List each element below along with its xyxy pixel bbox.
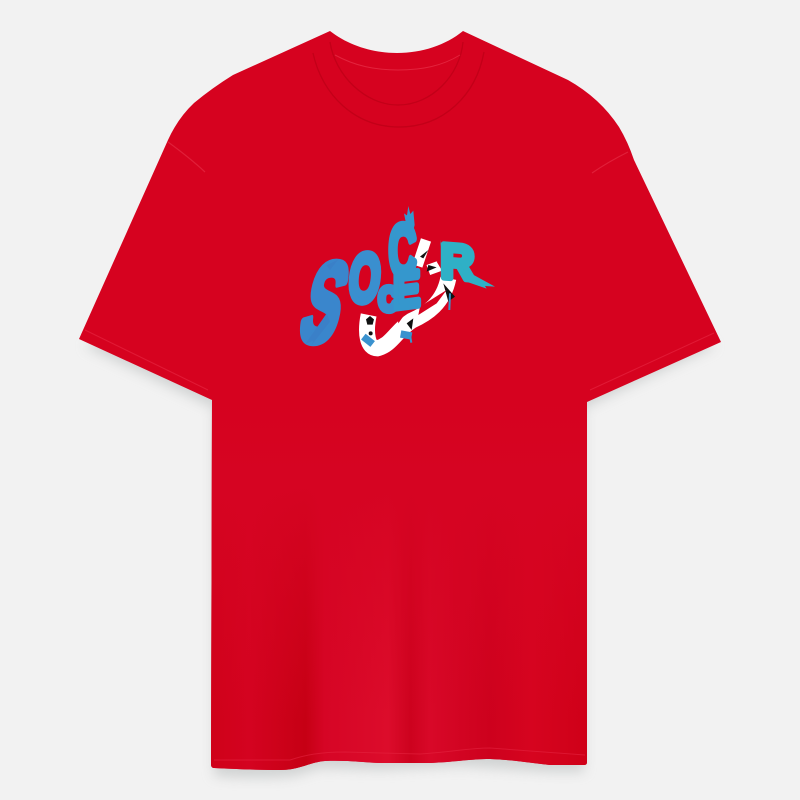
R brush marks: [440, 240, 495, 289]
blue overlay on swoosh: [363, 334, 412, 344]
sleeve hems: [85, 330, 714, 390]
drips: [410, 293, 450, 343]
letter C: C: [389, 211, 416, 292]
letter O: O: [346, 240, 384, 316]
letter S: S: [289, 239, 361, 366]
inner back collar: [335, 55, 460, 70]
lettering: [289, 211, 474, 366]
sleeve creases: [168, 142, 628, 173]
shirt silhouette: [79, 31, 721, 770]
t-shirt: [79, 31, 721, 770]
red cuts: [397, 257, 447, 323]
S top tip: [327, 259, 338, 270]
body tone: [212, 400, 587, 720]
garment shadow: [84, 340, 716, 778]
hem stitch: [214, 748, 585, 760]
soccer logo: [289, 206, 495, 366]
soccer ball marks: [366, 250, 455, 335]
C brush neck: [400, 206, 415, 233]
letter second C: C: [379, 282, 398, 318]
white swoosh letters: [363, 240, 448, 348]
collar seams: [313, 42, 484, 127]
letter R: R: [441, 235, 474, 291]
right sleeve seam: [586, 118, 590, 400]
brush tips: [305, 206, 495, 345]
left sleeve seam: [205, 150, 207, 396]
body folds: [211, 400, 587, 770]
white C stroke: [367, 278, 448, 348]
letter E: E: [393, 260, 420, 320]
white E stroke: [417, 240, 445, 270]
S brush tail: [305, 313, 330, 345]
